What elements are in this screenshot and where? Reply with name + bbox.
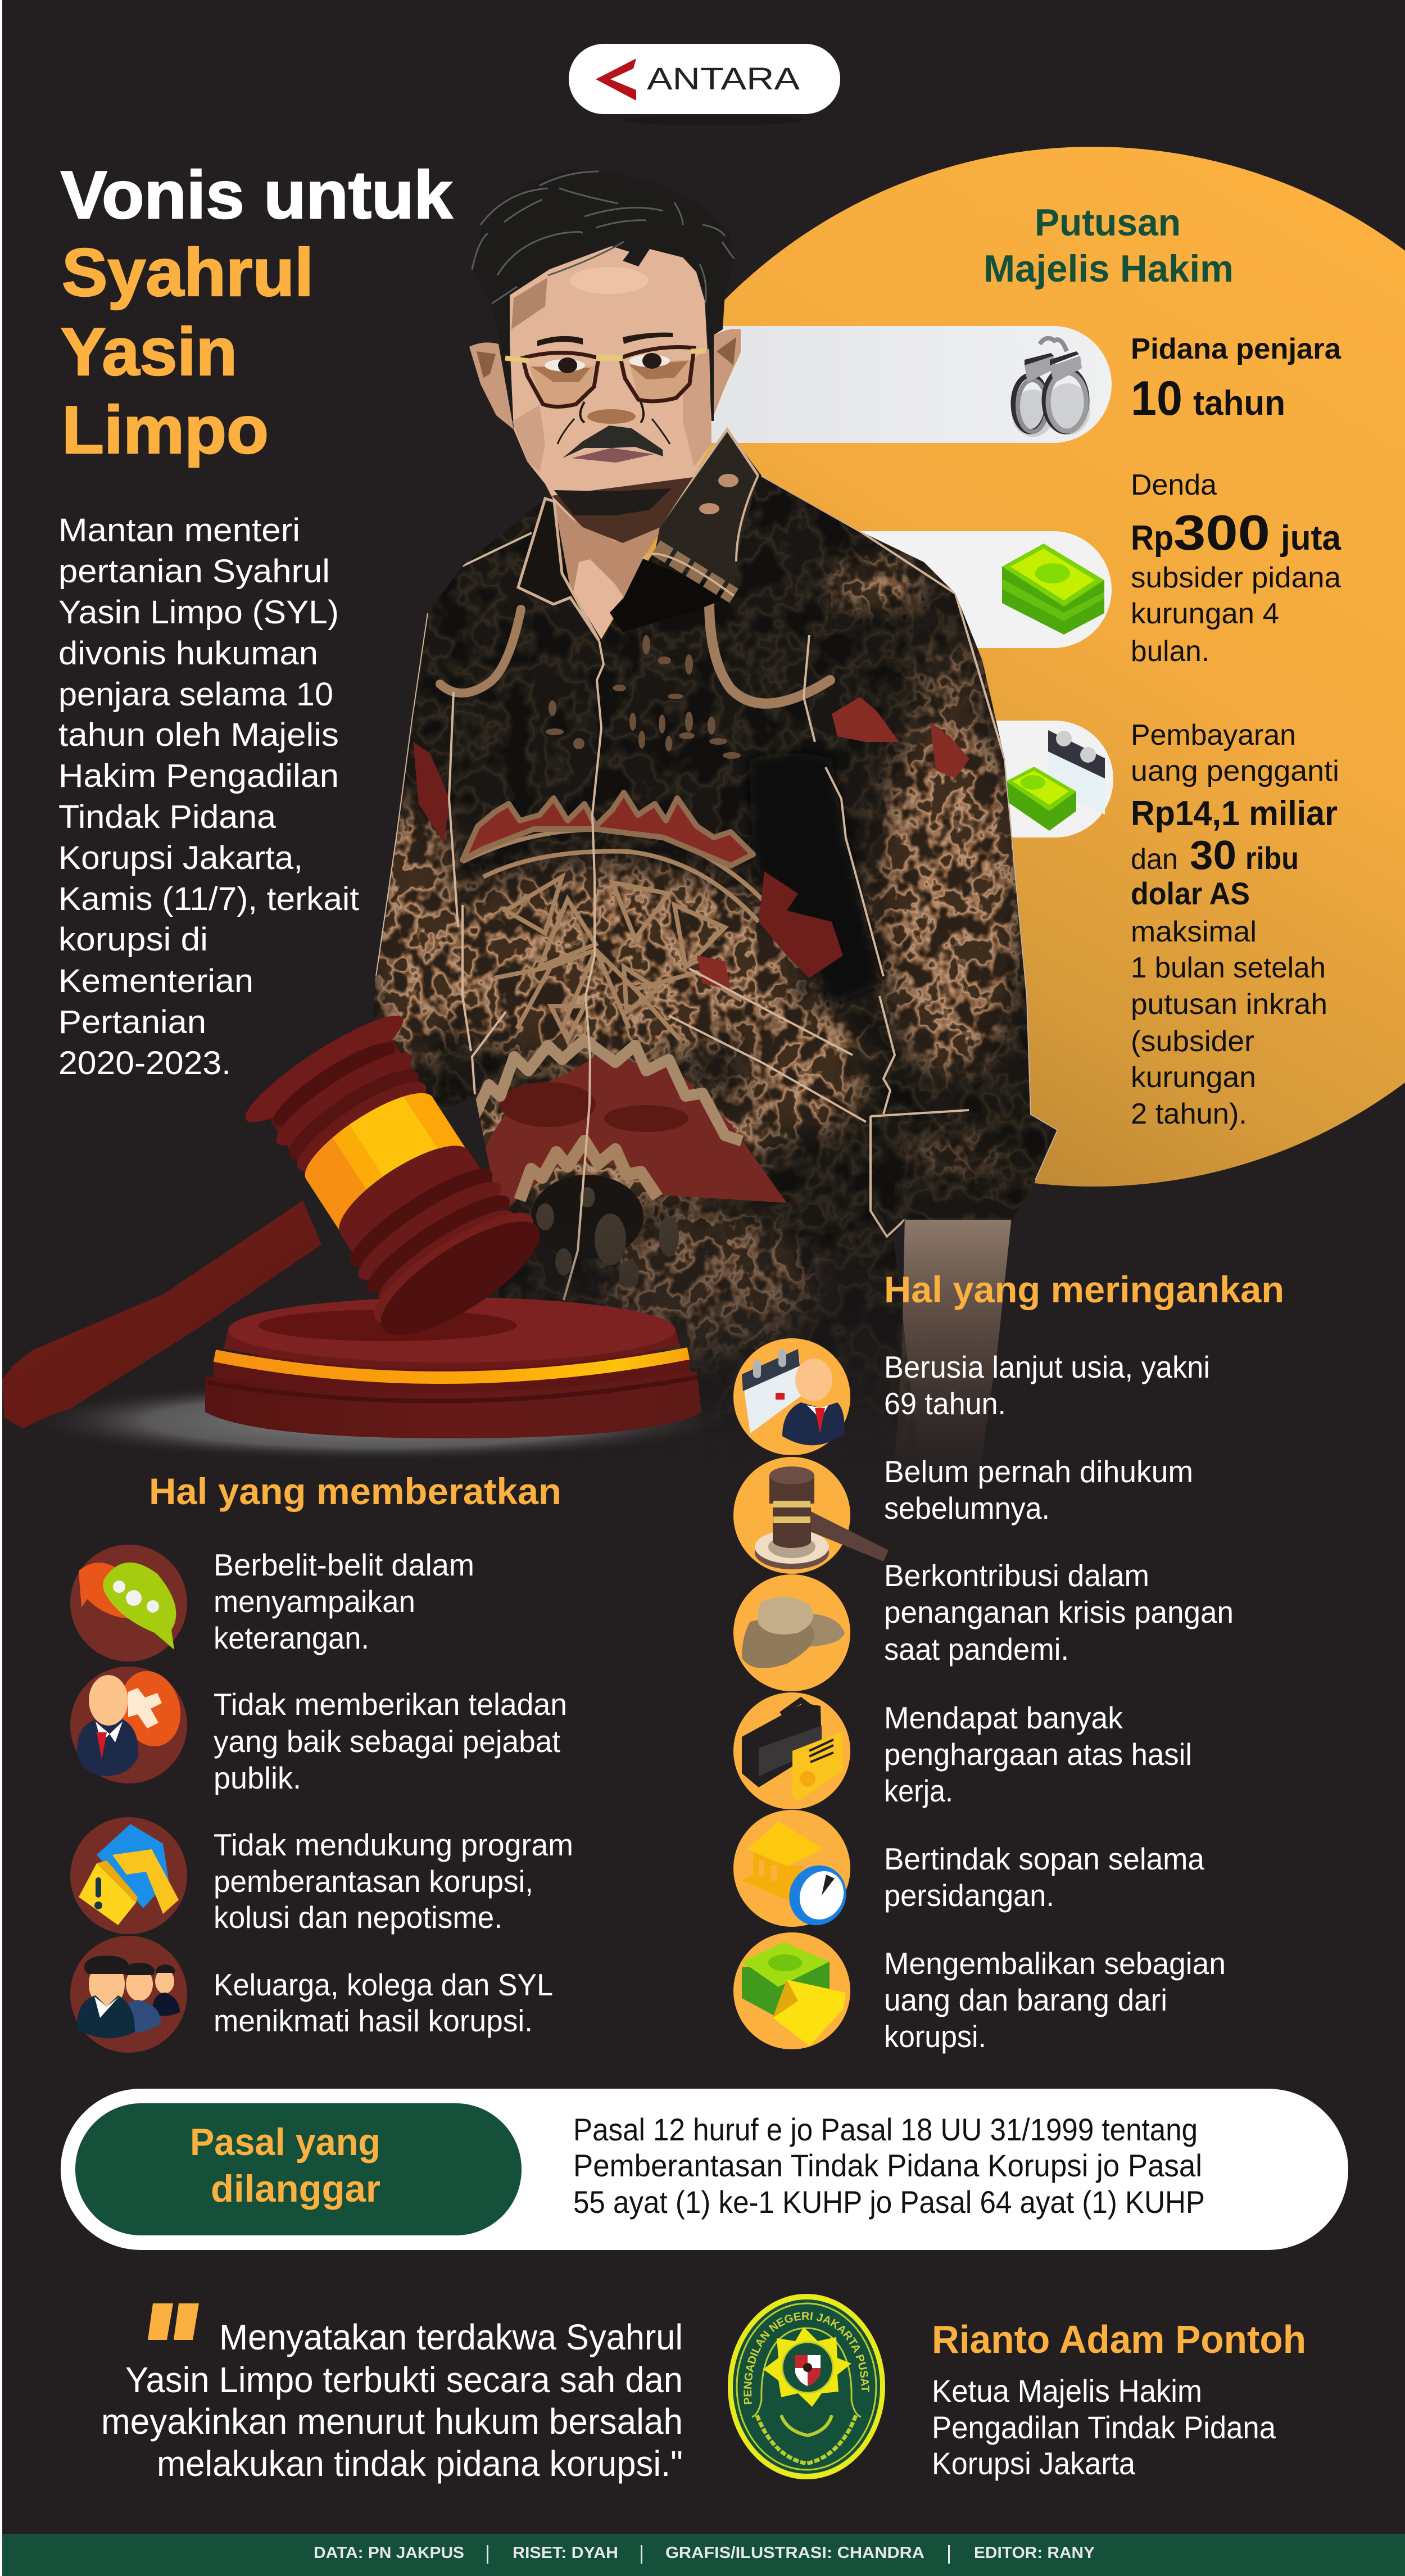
item: courthouse and clock icon bbox=[733, 1810, 856, 1935]
text: mitigating 2: Belum pernah dihukum bbox=[884, 1454, 1193, 1489]
item: small gavel icon bbox=[733, 1457, 889, 1574]
text: mitigating 6: korupsi. bbox=[884, 2019, 986, 2054]
text: prison sentence: tahun bbox=[1193, 384, 1285, 423]
footer credits bbox=[2, 2534, 1405, 2576]
text: replacement payment: dolar AS bbox=[1131, 876, 1250, 911]
eyes bbox=[545, 353, 670, 373]
panel: articles violated bbox=[61, 2089, 1348, 2250]
text: mitigating 3: saat pandemi. bbox=[884, 1632, 1069, 1667]
text: prison sentence: Pidana penjara bbox=[1131, 333, 1341, 365]
text: mitigating 1: Berusia lanjut usia, yakni bbox=[884, 1350, 1210, 1384]
text block: intro paragraph: Kementerian bbox=[58, 963, 253, 999]
text: aggravating 2: yang baik sebagai pejabat bbox=[214, 1724, 560, 1759]
glasses bbox=[505, 347, 706, 407]
title bbox=[61, 157, 452, 468]
item: warning icon bbox=[70, 1817, 187, 1934]
heading: Putusan Majelis Hakim: Majelis Hakim bbox=[984, 247, 1234, 290]
quote: meyakinkan menurut hukum bersalah bbox=[101, 2401, 683, 2442]
text block: intro paragraph: korupsi di bbox=[58, 921, 208, 958]
text: mitigating 6: uang dan barang dari bbox=[884, 1982, 1167, 2017]
text: mitigating 1 bbox=[884, 1350, 1210, 1421]
nose bbox=[558, 402, 670, 444]
text: aggravating 1 bbox=[214, 1547, 474, 1655]
item: money and gold icon bbox=[733, 1932, 850, 2049]
pill: replacement payment bbox=[843, 721, 1113, 837]
title: Yasin bbox=[61, 314, 237, 390]
glow under block bbox=[22, 1380, 731, 1461]
text: replacement payment: 2 tahun). bbox=[1131, 1098, 1247, 1130]
panel: orange verdict circle bbox=[573, 147, 1405, 1187]
heading: Putusan Majelis Hakim bbox=[984, 201, 1234, 290]
logo: ANTARA: ANTARA bbox=[647, 61, 800, 96]
text: replacement payment: (subsider bbox=[1131, 1025, 1254, 1058]
text: aggravating 2: Tidak memberikan teladan bbox=[214, 1687, 567, 1722]
collar left bbox=[518, 499, 599, 641]
icon: court seal: PENGADILAN NEGERI JAKARTA PUSAT bbox=[744, 2312, 869, 2405]
text: mitigating 3 bbox=[884, 1558, 1234, 1667]
dark void bbox=[749, 753, 882, 1006]
text: aggravating 4: Keluarga, kolega dan SYL bbox=[214, 1967, 553, 2002]
eyebrows bbox=[537, 333, 673, 346]
text block: intro paragraph bbox=[58, 512, 359, 1081]
quote: melakukan tindak pidana korupsi." bbox=[157, 2443, 683, 2484]
footer credits: DATA: PN JAKPUS bbox=[314, 2544, 464, 2562]
icon: court seal bbox=[728, 2294, 885, 2479]
badge: Pasal yang dilanggar bbox=[75, 2103, 522, 2235]
icon: quotation mark bbox=[148, 2303, 199, 2340]
badge: Pasal yang dilanggar: Pasal yang bbox=[190, 2121, 380, 2163]
name: Rianto Adam Pontoh: Rianto Adam Pontoh bbox=[932, 2317, 1306, 2361]
quote bbox=[101, 2317, 683, 2484]
text: mitigating 1: 69 tahun. bbox=[884, 1386, 1006, 1421]
title: Vonis untuk bbox=[61, 157, 452, 233]
face bbox=[510, 246, 711, 541]
heading: Putusan Majelis Hakim: Putusan bbox=[1035, 201, 1181, 244]
text: aggravating 4: menikmati hasil korupsi. bbox=[214, 2003, 533, 2038]
heading: Hal yang memberatkan: Hal yang memberatkan bbox=[149, 1470, 561, 1512]
text: mitigating 2: sebelumnya. bbox=[884, 1491, 1050, 1525]
text: articles: 55 ayat (1) ke-1 KUHP jo Pasal 64 ayat (1) KUHP bbox=[573, 2184, 1205, 2220]
moustache bbox=[563, 425, 663, 458]
text: judge title: Pengadilan Tindak Pidana bbox=[932, 2410, 1276, 2445]
text: mitigating 4: Mendapat banyak bbox=[884, 1700, 1123, 1735]
text block: intro paragraph: Hakim Pengadilan bbox=[58, 758, 339, 794]
illustration: gavel and sounding block bbox=[2, 1002, 731, 1461]
text: aggravating 1: Berbelit-belit dalam bbox=[214, 1547, 474, 1582]
face shading bbox=[511, 267, 711, 472]
text: aggravating 2: publik. bbox=[214, 1760, 301, 1795]
text: aggravating 3 bbox=[214, 1827, 573, 1935]
text: replacement payment bbox=[1131, 719, 1339, 1130]
text: fine bbox=[1131, 469, 1341, 668]
text: replacement payment: kurungan bbox=[1131, 1061, 1256, 1094]
text block: intro paragraph: Korupsi Jakarta, bbox=[58, 840, 303, 876]
lower red arch bbox=[472, 1040, 787, 1287]
text block: intro paragraph: Mantan menteri bbox=[58, 512, 300, 549]
text: aggravating 1: menyampaikan bbox=[214, 1584, 415, 1619]
text: judge title: Ketua Majelis Hakim bbox=[932, 2373, 1202, 2409]
illustration: Syahrul Yasin Limpo bbox=[337, 169, 1096, 1490]
footer credits: GRAFIS/ILUSTRASI: CHANDRA bbox=[665, 2544, 924, 2562]
item: briefcase and certificate icon bbox=[733, 1692, 850, 1809]
text: articles bbox=[573, 2112, 1205, 2220]
text block: intro paragraph: pertanian Syahrul bbox=[58, 553, 330, 590]
text: fine: kurungan 4 bbox=[1131, 597, 1279, 630]
text: judge title bbox=[932, 2373, 1276, 2481]
seed specks bbox=[546, 635, 741, 759]
text: replacement payment: uang pengganti bbox=[1131, 755, 1339, 787]
text: judge title: Korupsi Jakarta bbox=[932, 2446, 1136, 2481]
text: fine: juta bbox=[1280, 519, 1341, 558]
hair bbox=[472, 169, 734, 429]
pill: prison sentence bbox=[674, 326, 1112, 443]
text: fine: Rp bbox=[1131, 519, 1173, 558]
text: replacement payment: maksimal bbox=[1131, 916, 1257, 948]
item: person with cross icon bbox=[70, 1664, 189, 1783]
text: replacement payment: 1 bulan setelah bbox=[1131, 952, 1326, 984]
text: mitigating 5: Bertindak sopan selama bbox=[884, 1841, 1204, 1876]
text: fine: Denda bbox=[1131, 469, 1217, 501]
text: mitigating 3: penanganan krisis pangan bbox=[884, 1595, 1234, 1629]
text: aggravating 4 bbox=[214, 1967, 553, 2038]
footer credits: RISET: DYAH bbox=[513, 2544, 618, 2562]
beard shadow and goatee bbox=[552, 477, 693, 543]
quote: Menyatakan terdakwa Syahrul bbox=[219, 2317, 683, 2357]
item: speech bubbles icon bbox=[70, 1545, 187, 1662]
text: articles: Pasal 12 huruf e jo Pasal 18 UU 31/1999 tentang bbox=[573, 2112, 1198, 2147]
text: aggravating 3: kolusi dan nepotisme. bbox=[214, 1900, 502, 1935]
text block: intro paragraph: penjara selama 10 bbox=[58, 676, 333, 713]
text: mitigating 2 bbox=[884, 1454, 1193, 1525]
text block: intro paragraph: divonis hukuman bbox=[58, 635, 318, 672]
heading: Hal yang meringankan: Hal yang meringankan bbox=[884, 1269, 1284, 1310]
text block: intro paragraph: Yasin Limpo (SYL) bbox=[58, 594, 339, 631]
hair strands bbox=[472, 171, 734, 304]
icon: calendar and money bbox=[1006, 730, 1105, 831]
tan arcs bbox=[440, 601, 830, 704]
text: aggravating 3: Tidak mendukung program bbox=[214, 1827, 573, 1862]
text: fine: subsider pidana bbox=[1131, 562, 1341, 594]
sounding block bbox=[205, 1297, 701, 1438]
text block: intro paragraph: 2020-2023. bbox=[58, 1045, 231, 1081]
icon: handcuffs bbox=[1012, 338, 1090, 437]
text: prison sentence: 10 bbox=[1131, 372, 1182, 425]
text: replacement payment: ribu bbox=[1245, 840, 1299, 876]
neck bbox=[548, 475, 697, 639]
logo: ANTARA bbox=[569, 44, 840, 125]
title: Limpo bbox=[62, 392, 269, 468]
text: fine: bulan. bbox=[1131, 635, 1209, 668]
title: Syahrul bbox=[62, 235, 314, 310]
text: aggravating 3: pemberantasan korupsi, bbox=[214, 1864, 533, 1899]
item: people icon bbox=[70, 1936, 187, 2053]
text: replacement payment: Rp14,1 miliar bbox=[1131, 794, 1338, 833]
icon: money stack bbox=[1002, 544, 1104, 635]
quote: Yasin Limpo terbukti secara sah dan bbox=[125, 2360, 683, 2400]
text: replacement payment: 30 bbox=[1190, 833, 1236, 878]
lips bbox=[572, 448, 654, 463]
text: mitigating 5: persidangan. bbox=[884, 1878, 1054, 1913]
text: replacement payment: dan bbox=[1131, 843, 1178, 876]
text: mitigating 6 bbox=[884, 1946, 1226, 2054]
text: mitigating 4: kerja. bbox=[884, 1773, 953, 1808]
shirt seams bbox=[375, 476, 1058, 1300]
forearm bbox=[894, 1217, 1012, 1484]
text: mitigating 6: Mengembalikan sebagian bbox=[884, 1946, 1226, 1981]
text block: intro paragraph: tahun oleh Majelis bbox=[58, 717, 339, 753]
text block: intro paragraph: Tindak Pidana bbox=[58, 799, 277, 835]
text: aggravating 1: keterangan. bbox=[214, 1620, 369, 1655]
text: replacement payment: putusan inkrah bbox=[1131, 988, 1327, 1021]
text: mitigating 5 bbox=[884, 1841, 1204, 1913]
text: aggravating 2 bbox=[214, 1687, 567, 1795]
text: mitigating 4: penghargaan atas hasil bbox=[884, 1737, 1192, 1772]
badge: Pasal yang dilanggar: dilanggar bbox=[211, 2167, 380, 2210]
item: sacks icon bbox=[733, 1574, 850, 1691]
gavel head bbox=[235, 1002, 555, 1355]
pill: fine bbox=[815, 531, 1112, 648]
ears bbox=[469, 329, 741, 429]
red patches bbox=[413, 697, 969, 989]
text: mitigating 3: Berkontribusi dalam bbox=[884, 1558, 1149, 1593]
text: fine: 300 bbox=[1173, 505, 1270, 560]
text: mitigating 4 bbox=[884, 1700, 1192, 1808]
text block: intro paragraph: Kamis (11/7), terkait bbox=[58, 881, 359, 917]
text: replacement payment: Pembayaran bbox=[1131, 719, 1296, 751]
text block: intro paragraph: Pertanian bbox=[58, 1004, 206, 1040]
footer credits: EDITOR: RANY bbox=[974, 2544, 1095, 2562]
batik shirt bbox=[373, 451, 1058, 1406]
collar right bbox=[610, 429, 758, 632]
item: calendar and person icon bbox=[733, 1338, 850, 1455]
handle bbox=[2, 1201, 321, 1428]
text: articles: Pemberantasan Tindak Pidana Korupsi jo Pasal bbox=[573, 2148, 1202, 2183]
red flame band bbox=[463, 793, 753, 866]
text: prison sentence bbox=[1131, 333, 1341, 425]
